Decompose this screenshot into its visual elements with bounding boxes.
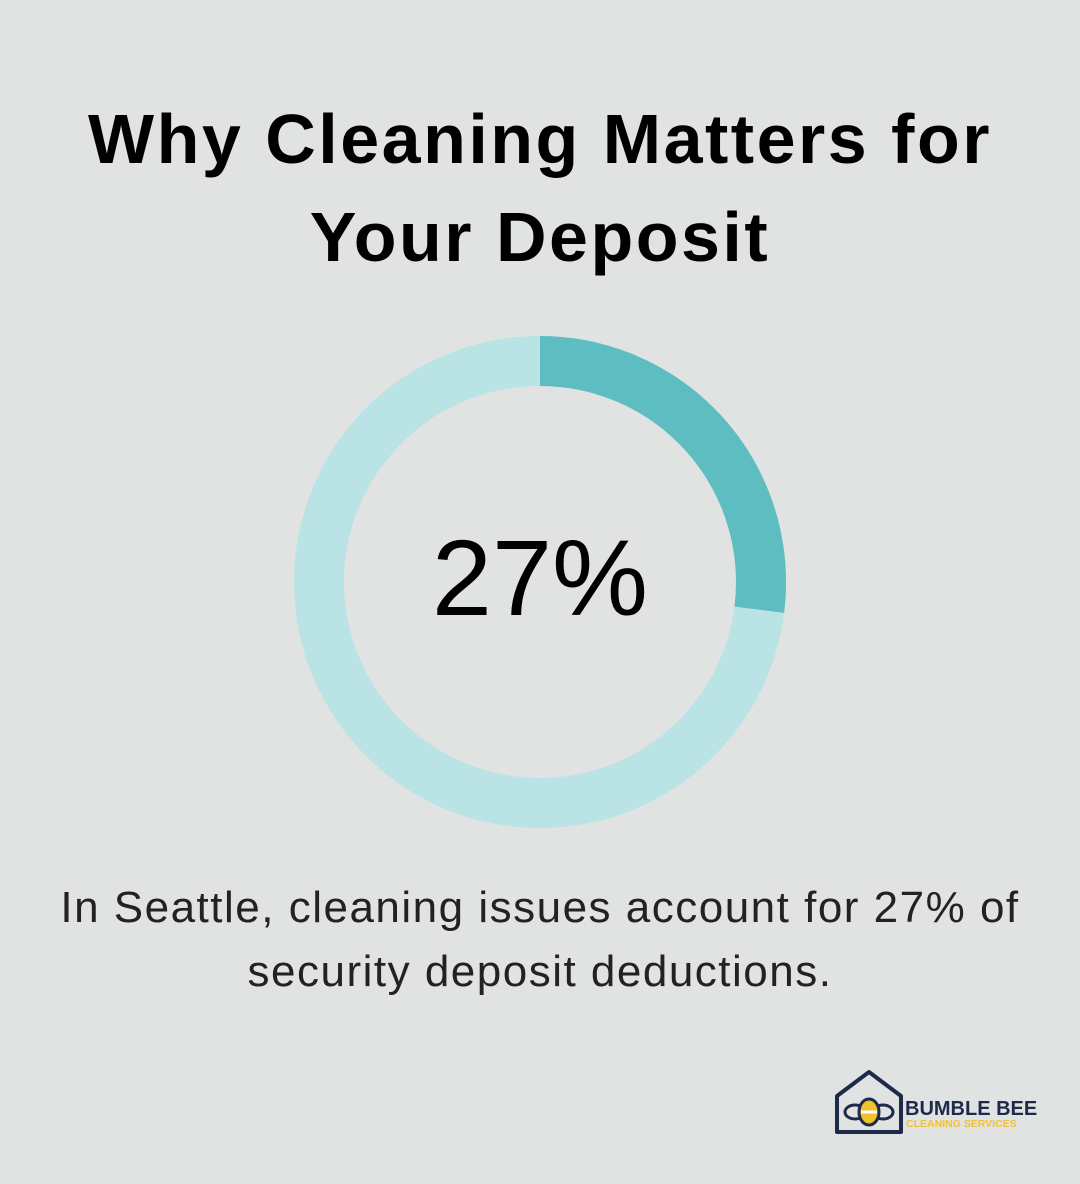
stat: 27%: 27% [432, 517, 648, 638]
title [88, 100, 992, 276]
logo: CLEANING SERVICES [906, 1118, 1017, 1130]
description: security deposit deductions. [248, 947, 832, 996]
description [60, 883, 1020, 996]
brand text: BUMBLE BEE [905, 1098, 1037, 1120]
description: In Seattle, cleaning issues account for 27% of [60, 883, 1020, 932]
logo [835, 1070, 1037, 1134]
icon: bee house [835, 1070, 903, 1134]
title: Why Cleaning Matters for [88, 100, 992, 178]
title: Your Deposit [310, 198, 770, 276]
